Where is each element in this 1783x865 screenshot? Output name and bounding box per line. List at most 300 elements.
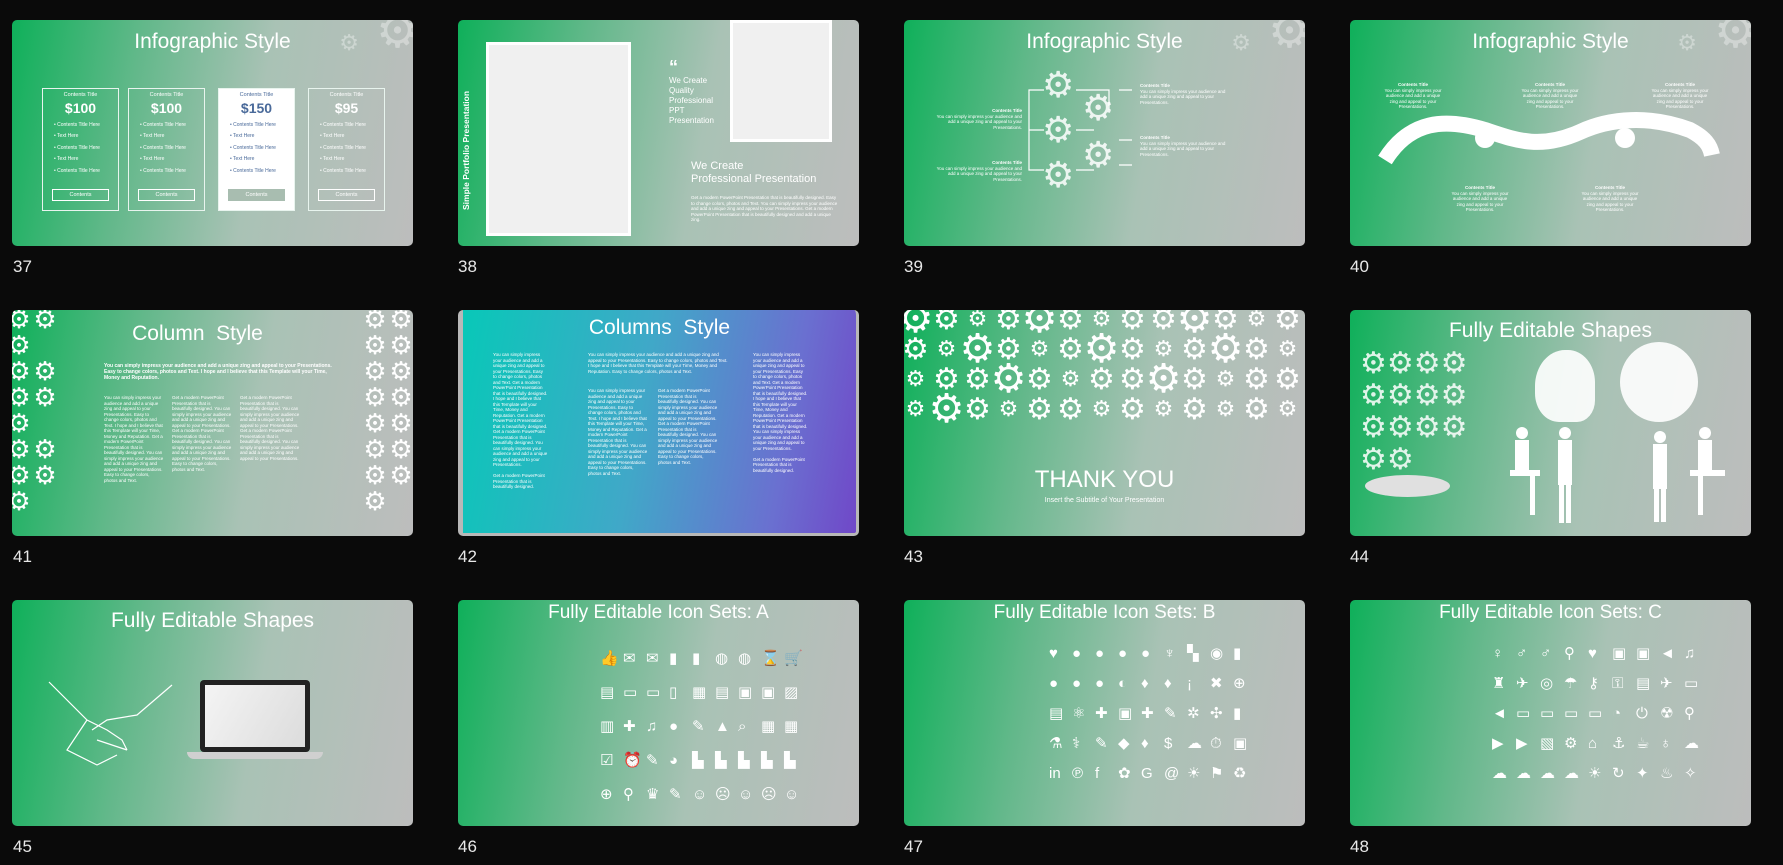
icon grid: ♥ xyxy=(1049,645,1058,662)
icon grid: 👍 xyxy=(600,650,619,667)
icon grid: ▮ xyxy=(669,650,677,667)
small gear: ⚙ xyxy=(1231,30,1251,55)
left gears: ⚙ xyxy=(33,434,57,464)
text blocks: You can simply impress your audience and add a unique zing and appeal to your Presentations. xyxy=(937,114,1022,130)
slide 46: icon set A xyxy=(458,600,859,826)
slide 37: pricing infographic xyxy=(12,20,413,246)
label 46: 46 xyxy=(458,837,477,856)
gear grid: ⚙⚙⚙⚙ xyxy=(1360,347,1468,380)
slide 38: portfolio xyxy=(458,20,859,246)
gear cloud: ⚙ xyxy=(929,387,964,431)
slide 47: icon set B xyxy=(904,600,1305,826)
icon grid: ✎ xyxy=(646,752,659,769)
icon grid: ▣ xyxy=(1612,645,1626,662)
icon grid: ● xyxy=(1049,675,1058,692)
icon grid: ✎ xyxy=(692,718,705,735)
right gears: ⚙ xyxy=(389,434,413,464)
slide 39: gear flow: You can simply impress your audience and add a unique zing and appeal to your Presentations. xyxy=(937,166,1022,182)
icon grid: ✣ xyxy=(1210,705,1223,722)
card 4: Contents xyxy=(335,192,358,198)
icon grid: f xyxy=(1095,765,1099,782)
icon grid: ▶ xyxy=(1516,735,1528,752)
icon grid: ◔ xyxy=(1612,705,1621,722)
slide 40: wave timeline xyxy=(1350,20,1751,246)
icon grid: ▙ xyxy=(761,752,773,769)
photo frame left xyxy=(486,42,631,236)
icon grid: ♦ xyxy=(1164,675,1172,692)
icon grid: ⏱ xyxy=(1210,735,1222,752)
right gears: ⚙ xyxy=(363,460,387,490)
card 1: • Contents Title Here xyxy=(54,144,100,150)
card 3 highlighted: • Contents Title Here xyxy=(230,122,276,128)
gear cloud: ⚙ xyxy=(964,362,991,396)
icon grid: ♦ xyxy=(1141,735,1149,752)
card 2: • Contents Title Here xyxy=(140,122,186,128)
slide 40: wave timeline: You can simply impress your audience and add a unique zing and appeal to your Presentations. xyxy=(1451,190,1509,212)
slide 40: wave timeline: Contents Title xyxy=(1595,185,1625,190)
icon grid: ▥ xyxy=(600,718,614,735)
icon grid: $ xyxy=(1164,735,1172,752)
icon grid: ☁ xyxy=(1540,765,1555,782)
icon grid: ⌂ xyxy=(1588,735,1597,752)
gear cloud: ⚙ xyxy=(999,396,1018,421)
gear cloud: ⚙ xyxy=(1030,336,1049,361)
label 48: 48 xyxy=(1350,837,1369,856)
slide 44: editable shapes xyxy=(1350,310,1751,536)
icon grid: ℗ xyxy=(1072,765,1083,782)
slide 39: gear flow: ⚙ xyxy=(1042,154,1074,195)
icon grid: ☁ xyxy=(1516,765,1531,782)
label 47: 47 xyxy=(904,837,923,856)
label 45: 45 xyxy=(13,837,32,856)
card 2: • Contents Title Here xyxy=(140,168,186,174)
icon grid: ▭ xyxy=(1516,705,1530,722)
icon grid: ⚲ xyxy=(1564,645,1575,662)
icon grid: ◕ xyxy=(669,752,678,769)
title: Infographic Style xyxy=(134,30,291,53)
label 42: 42 xyxy=(458,547,477,566)
right gears: ⚙ xyxy=(363,486,387,516)
slide 40: wave timeline: Contents Title xyxy=(1665,82,1695,87)
gear cloud: ⚙ xyxy=(960,327,995,371)
icon grid: ◐ xyxy=(1118,675,1127,692)
slide 39: gear flow: Contents Title xyxy=(1140,83,1170,88)
icon grid: ● xyxy=(1141,645,1150,662)
gear icons: ⚙ xyxy=(1042,64,1074,105)
icon grid: ◎ xyxy=(1540,675,1553,692)
text blocks: You can simply impress your audience and add a unique zing and appeal to your Presentations. xyxy=(1384,88,1442,109)
card 3 highlighted: Contents xyxy=(245,192,268,198)
intro: You can simply impress your audience and add a unique zing and appeal to your Presentations. Easy to change colors, photos and Text. I hope and I believe that this Template will your Time, Money and Reputation. xyxy=(104,363,332,381)
right gears: ⚙ xyxy=(363,434,387,464)
gear cloud: ⚙ xyxy=(964,392,991,426)
icon grid: ♨ xyxy=(1660,765,1673,782)
laptop base xyxy=(187,752,323,759)
right gears: ⚙ xyxy=(363,356,387,386)
right column text: Get a modern PowerPoint Presentation that is beautifully designed. xyxy=(753,456,805,472)
card 3 highlighted: • Contents Title Here xyxy=(230,144,276,150)
left gears: ⚙ xyxy=(33,356,57,386)
icon grid: ☢ xyxy=(1660,705,1673,722)
heading xyxy=(691,160,816,185)
slide 40: wave timeline: Contents Title xyxy=(1535,82,1565,87)
gear cloud: ⚙ xyxy=(1154,396,1173,421)
icon grid: ▣ xyxy=(1118,705,1132,722)
card 2: Contents xyxy=(155,192,178,198)
icon grid: ▙ xyxy=(715,752,727,769)
gear cloud: ⚙ xyxy=(937,336,956,361)
slide 41: column style: Get a modern PowerPoint Presentation that is beautifully designed. You can simply impress your audience and add a unique zing and appeal to your Presentations. Get a modern PowerPoint Presentation that is beautifully designed. You can simply impress your audience and add a unique zing and appeal to your Presentations. Easy to change colors, photos and Text. xyxy=(172,395,231,472)
slide 39: gear flow xyxy=(904,20,1305,246)
icon grid: ▣ xyxy=(761,684,775,701)
left column text: You can simply impress your audience and add a unique zing and appeal to your Presentations. Easy to change colors, photos and Text. Get a modern PowerPoint Presentation that is beautifully designed. I hope and I believe that this Template will your Time, Money and Reputation. Get a modern PowerPoint Presentation that is beautifully designed. Get a modern PowerPoint Presentation that is beautifully designed. You can simply impress your audience and add a unique zing and appeal to your Presentations. xyxy=(493,352,547,467)
slide 40: wave timeline: You can simply impress your audience and add a unique zing and appeal to your Presentations. xyxy=(1651,88,1709,109)
icon grid: ▨ xyxy=(784,684,798,701)
gear cloud: ⚙ xyxy=(1119,332,1146,366)
slide 39: gear flow: Contents Title xyxy=(992,160,1022,165)
icon grid: ▙ xyxy=(692,752,704,769)
icon grid: ☹ xyxy=(761,786,777,803)
icon grid: ▮ xyxy=(692,650,700,667)
icon grid: ▶ xyxy=(1492,735,1504,752)
icon grid: ● xyxy=(1095,675,1104,692)
icon grid: ▭ xyxy=(623,684,637,701)
icon grid: ▚ xyxy=(1187,645,1199,662)
card 1: • Text Here xyxy=(54,133,78,139)
slide 42: columns style gradient xyxy=(458,310,859,536)
icon grid: ☹ xyxy=(715,786,731,803)
card 2: • Text Here xyxy=(140,156,164,162)
left gears xyxy=(12,310,57,516)
slide 39: gear flow: ⚙ xyxy=(1082,134,1114,175)
label 41: 41 xyxy=(13,547,32,566)
icon grid: ▯ xyxy=(669,684,677,701)
gear cloud: ⚙ xyxy=(1278,396,1297,421)
icon grid: @ xyxy=(1164,765,1179,782)
icon grid: ▤ xyxy=(1049,705,1063,722)
icon grid: ▮ xyxy=(1233,705,1241,722)
gear cloud: ⚙ xyxy=(1026,392,1053,426)
icon grid: ☁ xyxy=(1492,765,1507,782)
icon grid: ✚ xyxy=(623,718,636,735)
card 4: • Contents Title Here xyxy=(320,122,366,128)
card 4 xyxy=(308,88,385,211)
quote: “ xyxy=(669,57,678,77)
gear cloud: ⚙ xyxy=(1084,327,1119,371)
icon grid: ✈ xyxy=(1660,675,1673,692)
card 1: $100 xyxy=(65,100,96,116)
left gears: ⚙ xyxy=(33,382,57,412)
bulb head xyxy=(1620,342,1698,422)
icon grid: ▤ xyxy=(1636,675,1650,692)
icon grid: ✲ xyxy=(1187,705,1200,722)
handshake line art xyxy=(48,682,172,766)
card 3 highlighted: • Text Here xyxy=(230,133,254,139)
card 3 highlighted: $150 xyxy=(241,100,272,116)
icon grid: ☀ xyxy=(1588,765,1601,782)
icon grid: ☁ xyxy=(1187,735,1202,752)
center intro text: You can simply impress your audience and add a unique zing and appeal to your Presentations. Easy to change colors, photos and Text. I hope and I believe that this Template will your Time, Money and Reputation. Easy to change colors, photos and Text. xyxy=(588,352,728,374)
icon grid: ✎ xyxy=(669,786,682,803)
slide 40: wave timeline: You can simply impress your audience and add a unique zing and appeal to your Presentations. xyxy=(1521,88,1579,109)
icon grid: ✎ xyxy=(1095,735,1108,752)
icon grid: ♥ xyxy=(1588,645,1597,662)
people silhouettes xyxy=(1510,427,1725,523)
icon grid: ▣ xyxy=(738,684,752,701)
card 4: $95 xyxy=(335,100,358,116)
gear cloud: ⚙ xyxy=(1181,392,1208,426)
card 3 highlighted: • Contents Title Here xyxy=(230,168,276,174)
wave xyxy=(1378,112,1720,164)
right gears: ⚙ xyxy=(389,408,413,438)
icon grid xyxy=(600,650,803,803)
icon grid: ⌛ xyxy=(761,650,780,667)
gear grid: ⚙⚙⚙⚙ xyxy=(1360,411,1468,444)
label 44: 44 xyxy=(1350,547,1369,566)
card 3 highlighted: • Text Here xyxy=(230,156,254,162)
card 4: • Contents Title Here xyxy=(320,168,366,174)
gear cloud: ⚙ xyxy=(1181,332,1208,366)
label 39: 39 xyxy=(904,257,923,276)
label 43: 43 xyxy=(904,547,923,566)
left gears: ⚙ xyxy=(33,460,57,490)
icon grid xyxy=(1492,645,1699,782)
title: Fully Editable Icon Sets: B xyxy=(994,602,1215,623)
icon grid: ♂ xyxy=(1516,645,1527,662)
small gear: ⚙ xyxy=(1677,30,1697,55)
gear cloud: ⚙ xyxy=(1026,362,1053,396)
right gears: ⚙ xyxy=(389,460,413,490)
icon grid: ▦ xyxy=(761,718,775,735)
card 3 highlighted xyxy=(218,88,295,211)
gear cloud: ⚙ xyxy=(1119,362,1146,396)
icon grid: ♫ xyxy=(646,718,657,735)
icon grid: ▦ xyxy=(784,718,798,735)
quote: We Create xyxy=(669,76,707,85)
gear cloud: ⚙ xyxy=(1243,392,1270,426)
gear cloud: ⚙ xyxy=(991,357,1026,401)
icon grid: 🛒 xyxy=(784,650,803,667)
quote: PPT xyxy=(669,106,685,115)
quote: Presentation xyxy=(669,116,714,125)
right column text: You can simply impress your audience and add a unique zing and appeal to your Presentations. Easy to change colors, photos and Text. Get a modern PowerPoint Presentation that is beautifully designed. I hope and I believe that this Template will your Time, Money and Reputation. Get a modern PowerPoint Presentation that is beautifully designed. You can simply impress your audience and add a unique zing and appeal to your Presentations. xyxy=(753,352,807,450)
center column b: Get a modern PowerPoint Presentation that is beautifully designed. You can simply impress your audience and add a unique zing and appeal to your Presentations. Get a modern PowerPoint Presentation that is beautifully designed. You can simply impress your audience and add a unique zing and appeal to your Presentations. Easy to change colors, photos and Text. xyxy=(658,388,717,464)
icon grid: ♛ xyxy=(646,786,659,803)
icon grid: ◆ xyxy=(1118,735,1130,752)
vertical title: Simple Portfolio Presentation xyxy=(461,91,471,210)
title: Fully Editable Icon Sets: A xyxy=(548,602,769,623)
icon grid: ⚲ xyxy=(623,786,634,803)
text blocks: Contents Title xyxy=(1398,82,1428,87)
gear cloud: ⚙ xyxy=(906,396,925,421)
icon grid: ▧ xyxy=(1540,735,1554,752)
icon grid: ✦ xyxy=(1636,765,1649,782)
gear cloud: ⚙ xyxy=(1208,327,1243,371)
slide 39: gear flow: You can simply impress your audience and add a unique zing and appeal to your Presentations. xyxy=(1140,88,1225,104)
icon grid: ♻ xyxy=(1233,765,1246,782)
icon grid: ☑ xyxy=(600,752,613,769)
icon grid: ▙ xyxy=(784,752,796,769)
connector lines xyxy=(1028,89,1132,171)
icon grid: ⚛ xyxy=(1072,705,1085,722)
icon grid: ⚑ xyxy=(1210,765,1223,782)
icon grid: ⚓ xyxy=(1612,735,1625,752)
slide 43: thank you xyxy=(904,310,1305,536)
icon grid: ▭ xyxy=(646,684,660,701)
card 1: • Contents Title Here xyxy=(54,168,100,174)
right gears: ⚙ xyxy=(389,356,413,386)
heading: Professional Presentation xyxy=(691,173,816,185)
icon grid: ☺ xyxy=(784,786,799,803)
icon grid: ✈ xyxy=(1516,675,1529,692)
right gears: ⚙ xyxy=(363,408,387,438)
card 2: • Text Here xyxy=(140,133,164,139)
gear cloud: ⚙ xyxy=(1181,362,1208,396)
thank you: THANK YOU xyxy=(1035,466,1174,493)
gear cloud: ⚙ xyxy=(1092,396,1111,421)
icon grid: ▦ xyxy=(692,684,706,701)
card 1: Contents xyxy=(69,192,92,198)
icon grid: ☁ xyxy=(1564,765,1579,782)
card 2: $100 xyxy=(151,100,182,116)
icon grid: ♆ xyxy=(1164,645,1175,662)
icon grid: ⊕ xyxy=(1233,675,1246,692)
label 40: 40 xyxy=(1350,257,1369,276)
title: Fully Editable Shapes xyxy=(1449,319,1652,342)
icon grid: ▣ xyxy=(1636,645,1650,662)
icon grid: ✖ xyxy=(1210,675,1223,692)
icon grid: ⊕ xyxy=(600,786,613,803)
card 1: Contents Title xyxy=(64,92,97,98)
card 4: Contents Title xyxy=(330,92,363,98)
3d gears xyxy=(1365,475,1450,497)
icon grid: ▤ xyxy=(600,684,614,701)
icon grid: ⚷ xyxy=(1588,675,1599,692)
slide 39: gear flow: Contents Title xyxy=(1140,135,1170,140)
icon grid xyxy=(1049,644,1247,782)
card 2 xyxy=(128,88,205,211)
icon grid: ✚ xyxy=(1095,705,1108,722)
icon grid: ♦ xyxy=(1141,675,1149,692)
gear cloud: ⚙ xyxy=(1154,336,1173,361)
columns: You can simply impress your audience and add a unique zing and appeal to your Presentations. Easy to change colors, photos and Text. I hope and I believe that this Template will your Time, Money and Reputation. Get a modern PowerPoint Presentation that is beautifully designed. You can simply impress your audience and add a unique zing and appeal to your Presentations. Easy to change colors, photos and Text. xyxy=(104,395,163,482)
icon grid: ◄ xyxy=(1492,705,1507,722)
body text: Get a modern PowerPoint Presentation that is beautifully designed. Easy to change colors, photos and Text. You can simply impress your audience and add a unique zing and appeal to your Presentations. Get a modern PowerPoint Presentation that is beautifully designed and add a unique zing. xyxy=(691,195,837,222)
icon grid: ⚿ xyxy=(1612,675,1623,692)
icon grid: ✧ xyxy=(1684,765,1697,782)
icon grid: G xyxy=(1141,765,1153,782)
text blocks: Contents Title xyxy=(992,108,1022,113)
gear cloud: ⚙ xyxy=(1278,336,1297,361)
icon grid: ▭ xyxy=(1564,705,1578,722)
right gears xyxy=(363,310,413,516)
photo frame right xyxy=(730,20,832,142)
gear cloud: ⚙ xyxy=(906,366,925,391)
gear cloud: ⚙ xyxy=(1061,366,1080,391)
heading: We Create xyxy=(691,160,743,172)
right gears: ⚙ xyxy=(363,382,387,412)
icon grid: ⏻ xyxy=(1636,705,1648,722)
slide 39: gear flow: You can simply impress your audience and add a unique zing and appeal to your Presentations. xyxy=(1140,140,1225,156)
icon grid: ◍ xyxy=(738,650,751,667)
right gears: ⚙ xyxy=(363,330,387,360)
icon grid: ● xyxy=(669,718,678,735)
card 2: Contents Title xyxy=(150,92,183,98)
icon grid: ✉ xyxy=(623,650,636,667)
icon grid: ♫ xyxy=(1684,645,1695,662)
title: Column Style xyxy=(132,322,263,345)
icon grid: ⚲ xyxy=(1684,705,1695,722)
gear grid: ⚙⚙ xyxy=(1360,443,1414,476)
slide 39: gear flow: ⚙ xyxy=(1042,109,1074,150)
icon grid: ♁ xyxy=(1660,735,1671,752)
gear cloud: ⚙ xyxy=(1243,332,1270,366)
gear cloud: ⚙ xyxy=(1146,357,1181,401)
title: Fully Editable Shapes xyxy=(111,609,314,632)
gear grid xyxy=(1360,347,1468,476)
icon grid: ⏰ xyxy=(623,752,642,769)
title: Infographic Style xyxy=(1026,30,1183,53)
icon grid: ☁ xyxy=(1684,735,1699,752)
quote: Professional xyxy=(669,96,713,105)
gear cloud: ⚙ xyxy=(1088,362,1115,396)
left column text: Get a modern PowerPoint Presentation that is beautifully designed. xyxy=(493,473,545,489)
icon grid: ✿ xyxy=(1118,765,1131,782)
icon grid: in xyxy=(1049,765,1061,782)
icon grid: ☕ xyxy=(1636,735,1649,752)
gear cloud: ⚙ xyxy=(1216,396,1235,421)
gear cloud: ⚙ xyxy=(1274,362,1301,396)
right gears: ⚙ xyxy=(389,330,413,360)
gear cloud xyxy=(904,310,1301,431)
icon grid: ▭ xyxy=(1540,705,1554,722)
center column a: You can simply impress your audience and add a unique zing and appeal to your Presentations. Easy to change colors, photos and Text. I hope and I believe that this Template will your Time, Money and Reputation. Get a modern PowerPoint Presentation that is beautifully designed. You can simply impress your audience and add a unique zing and appeal to your Presentations. Easy to change colors, photos and Text. xyxy=(588,388,647,476)
card 2: • Contents Title Here xyxy=(140,144,186,150)
gear cloud: ⚙ xyxy=(995,332,1022,366)
icon grid: ● xyxy=(1118,645,1127,662)
gear cloud: ⚙ xyxy=(1057,392,1084,426)
title: Columns Style xyxy=(589,316,730,339)
title: Fully Editable Icon Sets: C xyxy=(1439,602,1662,623)
slide 45: handshake and laptop xyxy=(12,600,413,826)
icon grid: ● xyxy=(1095,645,1104,662)
icon grid: ◉ xyxy=(1210,645,1223,662)
icon grid: ▤ xyxy=(715,684,729,701)
icon grid: ● xyxy=(1072,645,1081,662)
gear cloud: ⚙ xyxy=(933,362,960,396)
icon grid: ◄ xyxy=(1660,645,1675,662)
small gear: ⚙ xyxy=(339,30,359,55)
icon grid: ● xyxy=(1072,675,1081,692)
title: Infographic Style xyxy=(1472,30,1629,53)
gear cloud: ⚙ xyxy=(1216,366,1235,391)
label 37: 37 xyxy=(13,257,32,276)
icon grid: ☂ xyxy=(1564,675,1577,692)
icon grid: ▣ xyxy=(1233,735,1247,752)
subtitle: Insert the Subtitle of Your Presentation xyxy=(1045,497,1164,504)
icon grid: ▲ xyxy=(715,718,730,735)
slide 39: gear flow: ⚙ xyxy=(1082,87,1114,128)
label 38: 38 xyxy=(458,257,477,276)
icon grid: ♜ xyxy=(1492,675,1505,692)
icon grid: ☀ xyxy=(1187,765,1200,782)
laptop xyxy=(200,680,310,752)
card 1 xyxy=(42,88,119,211)
right gears: ⚙ xyxy=(389,382,413,412)
slide 48: icon set C xyxy=(1350,600,1751,826)
slide 40: wave timeline: You can simply impress your audience and add a unique zing and appeal to your Presentations. xyxy=(1581,190,1639,212)
icon grid: ♀ xyxy=(1492,645,1503,662)
